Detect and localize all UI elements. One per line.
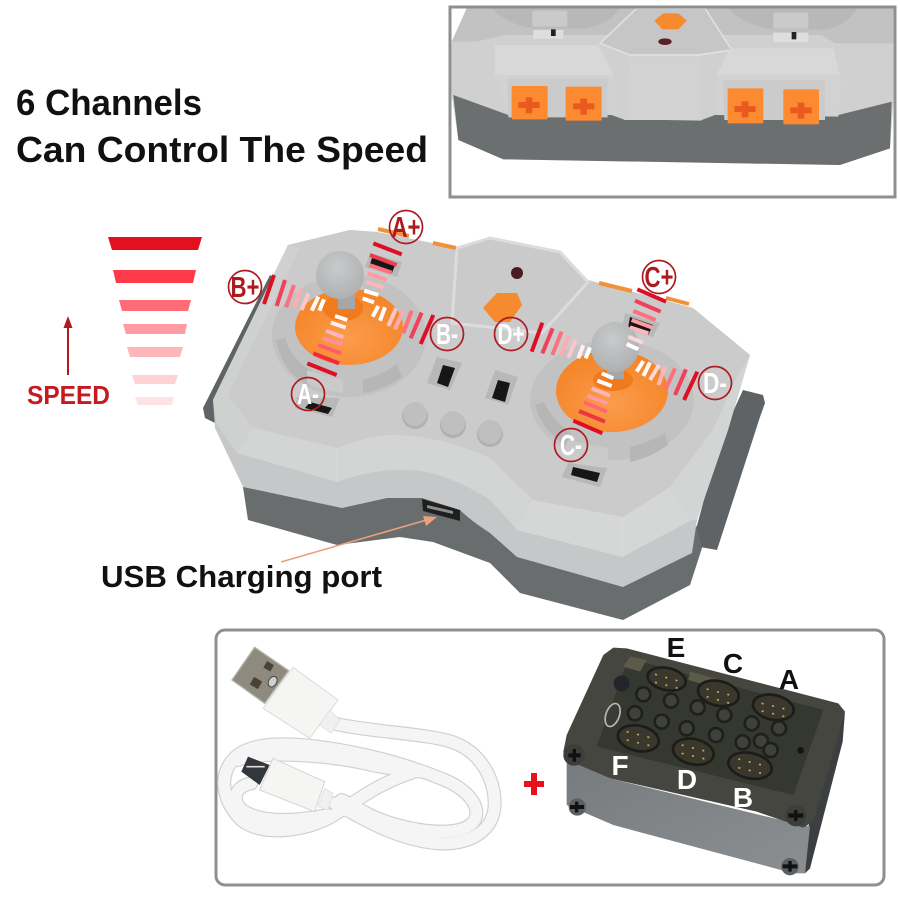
speed label: SPEED bbox=[27, 380, 110, 410]
channel labels: D+ bbox=[498, 319, 524, 351]
controller body bbox=[213, 230, 750, 587]
channel labels: B+ bbox=[230, 272, 260, 304]
controller base bbox=[243, 487, 702, 620]
connector pins bbox=[627, 674, 785, 773]
channel labels bbox=[230, 212, 727, 462]
screws bbox=[563, 744, 807, 875]
connectors bbox=[615, 664, 796, 783]
port labels: E bbox=[667, 632, 685, 663]
USB cable bbox=[224, 647, 495, 843]
port labels: C bbox=[723, 648, 743, 679]
port labels bbox=[611, 632, 799, 813]
buttons bbox=[402, 402, 503, 447]
port labels: F bbox=[611, 750, 629, 781]
orange tabs bbox=[378, 229, 689, 304]
port labels: A bbox=[779, 664, 799, 695]
speed ticks: A axis bbox=[307, 243, 402, 375]
standoffs bbox=[628, 687, 786, 757]
panel: accessories bbox=[216, 630, 884, 885]
port labels: B bbox=[733, 782, 753, 813]
speed bars bbox=[108, 237, 202, 405]
controller illustration bbox=[203, 210, 765, 620]
right joystick bbox=[530, 322, 694, 462]
label circles bbox=[228, 210, 732, 462]
panel: close-up of orange output ports bbox=[450, 7, 895, 197]
channel labels: B- bbox=[436, 319, 458, 351]
title bbox=[16, 82, 428, 170]
USB charging port label: USB Charging port bbox=[101, 559, 382, 594]
switch slots bbox=[295, 253, 660, 487]
speed scale bbox=[27, 237, 202, 410]
module sides bbox=[567, 712, 845, 873]
channel labels: A+ bbox=[392, 212, 420, 244]
receiver module bbox=[563, 648, 845, 875]
side grips bbox=[203, 275, 765, 550]
micro USB socket bbox=[602, 675, 804, 754]
left joystick bbox=[272, 251, 426, 397]
title: Can Control The Speed bbox=[16, 129, 428, 170]
speed ticks: D axis bbox=[532, 323, 697, 400]
speed ticks: B axis bbox=[264, 275, 433, 344]
speed ticks: C axis bbox=[573, 289, 666, 433]
centre plate bbox=[452, 238, 588, 333]
channel labels: D- bbox=[703, 368, 727, 400]
port labels: D bbox=[677, 764, 697, 795]
channel labels: C+ bbox=[644, 262, 674, 294]
USB port bbox=[422, 499, 460, 521]
plus sign bbox=[524, 773, 544, 795]
channel labels: C- bbox=[560, 430, 582, 462]
arrow: to USB port bbox=[281, 516, 437, 562]
arrow: speed up bbox=[64, 316, 72, 375]
module top bbox=[563, 648, 845, 828]
title: 6 Channels bbox=[16, 82, 202, 123]
channel labels: A- bbox=[297, 379, 319, 411]
